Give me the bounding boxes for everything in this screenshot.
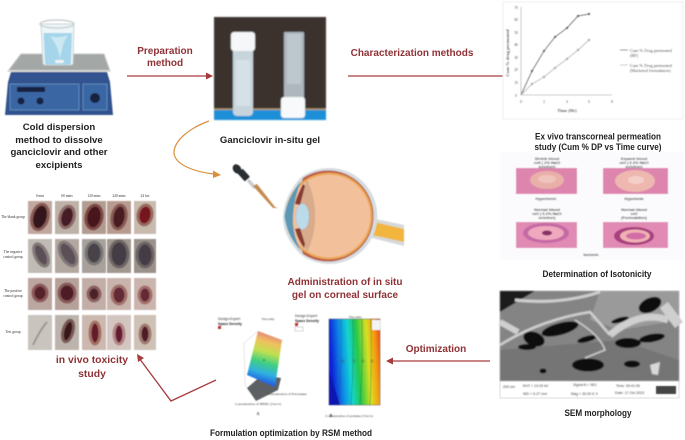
chart: RSM 3D surface plot: Concentration of HPMC (%w/v) <box>235 402 282 406</box>
panel: isotonicity: solution) <box>539 215 556 220</box>
label: cold dispersion <box>10 122 108 171</box>
chart: cumulative drug permeated: 8 <box>611 100 613 104</box>
chart: cumulative drug permeated: 40 <box>514 43 518 47</box>
chart: cumulative drug permeated: 30 <box>514 56 518 60</box>
label: ex vivo permeation <box>534 132 662 153</box>
chart: cumulative drug permeated: 60 <box>514 18 518 22</box>
panel: isotonicity: (Formulation) <box>621 215 648 220</box>
chart: cumulative drug permeated: Cum % Drug permeated <box>630 63 673 68</box>
chart: cumulative drug permeated: Time (Hr) <box>557 108 577 113</box>
arrow: vial to dropper curve <box>174 121 221 178</box>
chart: cumulative drug permeated: Cum % Drug permeated <box>630 48 673 53</box>
label: ganciclovir in-situ gel: Ganciclovir in-situ gel <box>220 135 320 146</box>
panel: isotonicity: Hypertonic <box>536 196 557 201</box>
chart: cumulative drug permeated: Cum % drug permeated <box>505 29 510 77</box>
arrow: optimization: Optimization <box>406 344 466 355</box>
panel: isotonicity: Hypotonic <box>624 196 645 201</box>
label: ex vivo permeation: Ex vivo transcorneal permeation <box>535 132 661 142</box>
label: in vivo toxicity: study <box>78 369 106 380</box>
panel: in vivo toxicity eye grid: control group <box>3 294 23 298</box>
photo: SEM morphology: WD = 6.27 mm <box>523 392 547 396</box>
chart: cumulative drug permeated: 0 <box>520 100 522 104</box>
panel: isotonicity: solution) <box>539 164 556 169</box>
panel: in vivo toxicity eye grid: 120 mins <box>87 194 101 198</box>
label: RSM optimization: Formulation optimization by RSM method <box>210 428 372 439</box>
label: determination of isotonicity: Determination of Isotonicity <box>542 269 652 280</box>
panel: in vivo toxicity eye grid: The positive <box>4 289 22 293</box>
panel: isotonicity: cell <box>631 211 637 216</box>
arrow: preparation method: method <box>147 58 183 69</box>
arrow: optimization <box>386 344 490 364</box>
label: cold dispersion: excipients <box>36 160 82 171</box>
chart: RSM 3D surface plot: Concentration of Poloxamer <box>267 392 308 396</box>
panel: in vivo toxicity eye grid: 0 min <box>36 194 44 198</box>
chart: cumulative drug permeated: 6 <box>588 100 590 104</box>
arrow: preparation method: Preparation <box>137 46 193 57</box>
chart: RSM 3D surface plot: Design-Expert <box>295 314 317 318</box>
chart: cumulative drug permeated: 2 <box>543 100 545 104</box>
arrow: preparation method <box>127 46 213 80</box>
arrow: characterization methods <box>348 48 511 80</box>
label: ex vivo permeation: study (Cum % DP vs Time curve) <box>534 142 662 153</box>
panel: isotonicity: Normal blood <box>621 207 647 212</box>
chart: cumulative drug permeated: 20 <box>514 68 518 72</box>
chart: RSM 3D surface plot: A <box>257 411 260 416</box>
chart: RSM 3D surface plot: Viscosity <box>261 317 275 321</box>
photo: SEM morphology <box>500 291 679 398</box>
photo: SEM morphology: 200 nm <box>503 385 515 389</box>
chart: RSM contour plot: Concentration of polymer (%w/v) <box>325 414 374 418</box>
photo: gel vials <box>214 17 326 120</box>
panel: isotonicity: Expand blood <box>621 156 648 161</box>
photo: SEM morphology: Date: 17 Oct 2023 <box>615 391 644 395</box>
label: administration of gel <box>288 277 402 301</box>
panel: isotonicity: Shrink blood <box>535 156 560 161</box>
photo: SEM morphology: Time: 09:41:06 <box>616 384 640 388</box>
label: cold dispersion: method to dissolve <box>15 135 103 146</box>
panel: in vivo toxicity eye grid: The negative <box>4 250 23 254</box>
chart: RSM 3D surface plot: Space Density <box>295 319 319 323</box>
panel: isotonicity: solution) <box>626 164 643 169</box>
panel: in vivo toxicity eye grid <box>1 194 156 350</box>
chart: RSM contour plot: Viscosity <box>348 315 362 319</box>
chart: cumulative drug permeated: 0 <box>515 94 517 98</box>
label: in vivo toxicity: in vivo toxicity <box>56 355 128 366</box>
chart: RSM 3D surface plot: Space Density <box>218 322 242 326</box>
photo: SEM morphology: EHT = 10.00 kV <box>523 384 549 388</box>
icon: eye cross-section <box>283 168 404 264</box>
chart: cumulative drug permeated: 4 <box>566 100 568 104</box>
chart: cumulative drug permeated <box>503 2 683 119</box>
panel: in vivo toxicity eye grid: 60 mins <box>61 194 73 198</box>
photo: SEM morphology: Mag = 30.00 K X <box>571 392 598 396</box>
chart: RSM contour plot <box>325 315 380 418</box>
panel: in vivo toxicity eye grid: Test group <box>5 330 21 334</box>
panel: isotonicity: cell ( 0.2% NaCl <box>619 160 649 165</box>
chart: RSM contour plot: B <box>330 413 333 418</box>
chart: cumulative drug permeated: 10 <box>514 81 518 85</box>
chart: cumulative drug permeated: 70 <box>514 6 518 10</box>
chart: cumulative drug permeated: 50 <box>514 31 518 35</box>
panel: isotonicity: Isotonic <box>583 252 599 257</box>
chart: cumulative drug permeated: (Marketed formulation) <box>630 68 671 73</box>
arrow: characterization methods: Characterization methods <box>351 48 474 59</box>
panel: isotonicity <box>500 152 684 260</box>
label: cold dispersion: ganciclovir and other <box>10 147 108 158</box>
photo: SEM morphology: Signal A = SE1 <box>573 383 597 387</box>
icon: dropper <box>231 163 278 208</box>
panel: isotonicity: Normal blood <box>534 207 560 212</box>
icon: magnetic stirrer with beaker <box>5 20 113 115</box>
panel: in vivo toxicity eye grid: The blank group <box>1 215 25 219</box>
panel: in vivo toxicity eye grid: 240 mins <box>112 194 126 198</box>
label: cold dispersion: Cold dispersion <box>23 122 95 133</box>
chart: RSM 3D surface plot <box>218 314 319 416</box>
label: administration of gel: gel on corneal surface <box>292 290 399 301</box>
panel: in vivo toxicity eye grid: control group <box>3 255 23 259</box>
panel: in vivo toxicity eye grid: 24 hrs <box>141 194 150 198</box>
arrow: RSM to in vivo toxicity <box>137 354 216 401</box>
label: in vivo toxicity <box>56 355 128 380</box>
chart: RSM 3D surface plot: Design-Expert <box>218 317 240 321</box>
label: administration of gel: Administration of in situ <box>288 277 402 288</box>
panel: isotonicity: cell ( 2% NaCl <box>534 160 560 165</box>
chart: cumulative drug permeated: (BF) <box>630 53 639 58</box>
label: SEM morphology: SEM morphology <box>564 408 632 419</box>
panel: isotonicity: cell ( 0.2% NaCl <box>532 211 562 216</box>
